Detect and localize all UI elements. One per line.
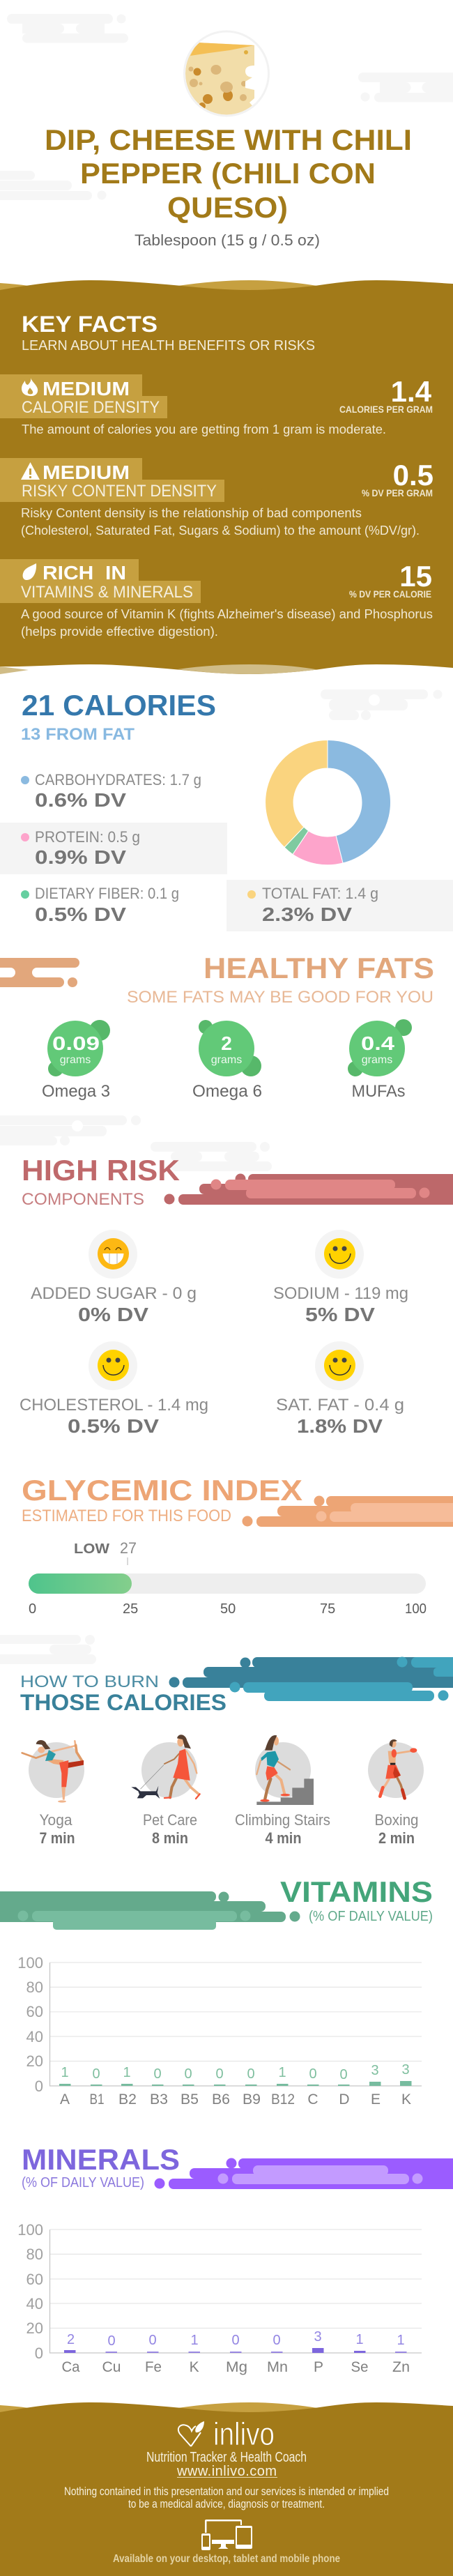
sodium item with smiley: SODIUM - 119 mg (273, 1284, 408, 1303)
omega 3 badge: 0.09 (52, 1032, 100, 1054)
sodium item with smiley (273, 1230, 408, 1325)
activity: pet care: Pet Care (143, 1811, 197, 1829)
panel: minerals (17, 2143, 453, 2375)
minerals bar chart: 0 (148, 2333, 157, 2348)
minerals bar chart (17, 2221, 422, 2375)
burn heading: THOSE CALORIES (20, 1690, 227, 1715)
panel: key facts (0, 280, 453, 674)
macro: total fat (247, 885, 378, 925)
saturated fat item with smiley: 1.8% DV (297, 1415, 383, 1437)
vitamins bar chart: 0 (153, 2066, 162, 2082)
fact: risky content density: MEDIUM (43, 462, 130, 483)
title: PEPPER (CHILI CON (80, 157, 376, 190)
vitamins bar chart: 0 (184, 2066, 192, 2082)
activity: pet care (131, 1735, 200, 1847)
activity: boxing: 2 min (378, 1829, 415, 1847)
fact: calorie density: CALORIE DENSITY (22, 398, 160, 417)
macro: dietary fiber (21, 885, 179, 925)
vitamins bar chart: 0 (309, 2066, 317, 2082)
decorative band (169, 1657, 453, 1688)
vitamins bar chart: E (371, 2091, 381, 2108)
cholesterol item with smiley: 0.5% DV (68, 1415, 159, 1437)
glycemic scale: 25 (123, 1601, 138, 1617)
vitamins bar chart: 80 (26, 1979, 43, 1996)
minerals bar chart: 100 (17, 2221, 43, 2239)
saturated fat item with smiley (276, 1341, 404, 1437)
vitamins bar chart: 0 (92, 2066, 100, 2082)
macro: total fat: 2.3% DV (262, 904, 352, 925)
glycemic heading: GLYCEMIC INDEX (22, 1474, 302, 1507)
MUFAs badge (348, 1019, 412, 1101)
donut chart (266, 740, 391, 865)
MUFAs badge: 0.4 (361, 1032, 395, 1054)
omega 6 badge (192, 1020, 262, 1101)
minerals bar chart: Mg (226, 2359, 247, 2375)
glycemic bar (29, 1573, 426, 1594)
activity: yoga (22, 1740, 84, 1847)
icon: devices (201, 2520, 252, 2550)
fact: rich in vitamins and minerals: % DV PER CALORIE (349, 588, 431, 600)
vitamins bar chart: C (307, 2091, 318, 2108)
minerals bar chart: 80 (26, 2246, 43, 2263)
vitamins bar chart: B6 (212, 2091, 230, 2108)
minerals bar chart: K (190, 2359, 199, 2375)
fact: risky content density: Risky Content density is the relationship of bad components (21, 506, 362, 520)
minerals bar chart: 20 (26, 2319, 43, 2337)
glycemic heading: ESTIMATED FOR THIS FOOD (22, 1507, 231, 1525)
vitamins bar chart: 0 (35, 2078, 43, 2095)
key facts heading (22, 312, 315, 353)
omega 3 badge: Omega 3 (42, 1082, 110, 1101)
fact: calorie density: 1.4 (391, 375, 432, 408)
high risk heading: HIGH RISK (22, 1154, 180, 1187)
title (45, 123, 412, 224)
healthy fats heading: HEALTHY FATS (204, 952, 434, 984)
website link: www.inlivo.com (176, 2464, 277, 2479)
sodium item with smiley: 5% DV (305, 1304, 375, 1325)
activity: pet care: 8 min (152, 1829, 188, 1847)
added sugar item with grinning face: ADDED SUGAR - 0 g (31, 1284, 197, 1303)
fact: risky content density: 0.5 (393, 459, 433, 491)
macro: carbohydrates (21, 771, 201, 811)
decorative band (0, 958, 79, 987)
burn heading (20, 1672, 227, 1715)
logo (178, 2416, 275, 2452)
omega 6 badge: grams (211, 1054, 242, 1066)
panel: healthy fats (0, 952, 434, 1101)
vitamins bar chart: 40 (26, 2028, 43, 2045)
serving size subtitle: Tablespoon (15 g / 0.5 oz) (135, 231, 320, 249)
minerals heading: MINERALS (22, 2143, 180, 2176)
decorative band (243, 1496, 453, 1527)
minerals bar chart: 60 (26, 2271, 43, 2288)
minerals bar chart: 2 (67, 2332, 75, 2347)
vitamins bar chart: 0 (339, 2067, 348, 2082)
minerals bar chart: Zn (392, 2359, 410, 2375)
key facts heading: KEY FACTS (22, 312, 158, 337)
glycemic scale: 75 (320, 1601, 335, 1617)
vitamins bar chart (17, 1954, 422, 2108)
vitamins bar chart: A (60, 2091, 70, 2108)
decorative band (155, 2158, 453, 2189)
minerals bar chart: 0 (231, 2333, 240, 2348)
MUFAs badge: MUFAs (351, 1082, 406, 1101)
vitamins bar chart: B3 (150, 2091, 168, 2108)
added sugar item with grinning face: 0% DV (78, 1304, 148, 1325)
macro: dietary fiber: DIETARY FIBER: 0.1 g (35, 885, 179, 902)
vitamins heading: VITAMINS (280, 1875, 433, 1908)
macro: protein: 0.9% DV (35, 846, 126, 868)
vitamins bar chart: 100 (17, 1954, 43, 1972)
fact: risky content density: RISKY CONTENT DENSITY (22, 482, 217, 501)
vitamins bar chart: 1 (278, 2065, 286, 2080)
glycemic value: 27 (120, 1539, 137, 1557)
calories heading: 21 CALORIES (22, 689, 216, 722)
activity: yoga: Yoga (39, 1811, 72, 1829)
MUFAs badge: grams (362, 1054, 392, 1066)
minerals bar chart: 1 (397, 2333, 405, 2348)
vitamins bar chart: 3 (371, 2063, 379, 2078)
fact: rich in vitamins and minerals: (helps provide effective digestion). (21, 625, 218, 639)
macro: protein (21, 828, 140, 868)
vitamins bar chart: B1 (89, 2091, 105, 2108)
tagline: Nutrition Tracker & Health Coach (146, 2450, 307, 2465)
minerals heading (22, 2143, 180, 2190)
minerals bar chart: 1 (190, 2333, 199, 2348)
vitamins bar chart: B2 (118, 2091, 137, 2108)
macro: carbohydrates: 0.6% DV (35, 789, 126, 811)
vitamins bar chart: B5 (181, 2091, 199, 2108)
icon: warning triangle (21, 462, 40, 480)
healthy fats heading (127, 952, 434, 1007)
added sugar item with grinning face (31, 1230, 197, 1325)
glycemic heading (22, 1474, 302, 1525)
macro: protein: PROTEIN: 0.5 g (35, 828, 140, 846)
fact: calorie density (0, 374, 433, 436)
high risk heading (22, 1154, 180, 1209)
cholesterol item with smiley: CHOLESTEROL - 1.4 mg (20, 1396, 208, 1415)
glycemic scale: 0 (29, 1601, 36, 1617)
saturated fat item with smiley: SAT. FAT - 0.4 g (276, 1396, 404, 1415)
activity: climbing stairs (235, 1735, 330, 1847)
calories heading (21, 689, 216, 744)
minerals bar chart: 1 (355, 2332, 364, 2347)
macro row boxes (0, 823, 453, 931)
activity: boxing (368, 1739, 424, 1847)
vitamins heading (280, 1875, 433, 1924)
fact: rich in vitamins and minerals: VITAMINS & MINERALS (21, 583, 193, 602)
minerals bar chart: 0 (272, 2333, 281, 2348)
vitamins bar chart: 60 (26, 2003, 43, 2020)
availability note: Available on your desktop, tablet and mobile phone (113, 2553, 340, 2565)
fact: calorie density: CALORIES PER GRAM (339, 404, 433, 415)
vitamins bar chart: D (339, 2091, 350, 2108)
panel: glycemic index (22, 1474, 453, 1617)
minerals bar chart: Fe (145, 2359, 162, 2375)
panel: high risk components (20, 1154, 453, 1437)
vitamins bar chart: K (401, 2091, 411, 2108)
minerals bar chart: 0 (107, 2333, 116, 2349)
omega 3 badge (42, 1020, 110, 1101)
icon: leaf (23, 563, 36, 580)
activity: climbing stairs: Climbing Stairs (235, 1811, 330, 1829)
macro: dietary fiber: 0.5% DV (35, 904, 126, 925)
panel: calories (0, 689, 453, 931)
glycemic scale (29, 1601, 427, 1617)
activity: yoga: 7 min (39, 1829, 75, 1847)
calories heading: 13 FROM FAT (21, 725, 135, 744)
minerals heading: (% OF DAILY VALUE) (22, 2175, 144, 2190)
fact: rich in vitamins and minerals (0, 559, 433, 639)
vitamins bar chart: 1 (123, 2065, 131, 2080)
logo: inlivo (213, 2416, 275, 2452)
fact: risky content density (0, 458, 433, 538)
minerals bar chart: 0 (35, 2345, 43, 2362)
glycemic value (74, 1539, 137, 1565)
title: QUESO) (167, 191, 288, 224)
minerals bar chart: Se (351, 2359, 368, 2375)
glycemic value: LOW (74, 1541, 109, 1557)
minerals bar chart: P (314, 2359, 323, 2375)
minerals bar chart: Cu (102, 2359, 121, 2375)
panel: vitamins (0, 1875, 433, 2108)
fact: rich in vitamins and minerals: 15 (399, 560, 432, 593)
icon: cheese photo in circle (183, 31, 270, 117)
fact: risky content density: (Cholesterol, Saturated Fat, Sugars & Sodium) to the amount (%DV/gr). (21, 524, 420, 538)
minerals bar chart: Mn (267, 2359, 288, 2375)
burn heading: HOW TO BURN (20, 1672, 159, 1691)
title: DIP, CHEESE WITH CHILI (45, 123, 412, 156)
fact: risky content density: % DV PER GRAM (362, 487, 433, 498)
vitamins bar chart: 0 (247, 2066, 255, 2082)
decorative band (164, 1174, 453, 1205)
minerals bar chart: Ca (61, 2359, 80, 2375)
macro: carbohydrates: CARBOHYDRATES: 1.7 g (35, 771, 201, 788)
high risk heading: COMPONENTS (22, 1190, 144, 1209)
disclaimer: to be a medical advice, diagnosis or treatment. (128, 2497, 325, 2510)
glycemic scale: 50 (220, 1601, 236, 1617)
fact: rich in vitamins and minerals: RICH IN (43, 562, 126, 584)
vitamins heading: (% OF DAILY VALUE) (309, 1909, 433, 1924)
vitamins bar chart: 20 (26, 2052, 43, 2070)
omega 3 badge: grams (60, 1054, 91, 1066)
fact: calorie density: The amount of calories you are getting from 1 gram is moderate. (22, 422, 386, 436)
disclaimer (64, 2485, 389, 2510)
icon: flame (22, 378, 38, 396)
key facts heading: LEARN ABOUT HEALTH BENEFITS OR RISKS (22, 338, 315, 353)
activity: climbing stairs: 4 min (265, 1829, 301, 1847)
omega 6 badge: Omega 6 (192, 1082, 262, 1101)
macro: total fat: TOTAL FAT: 1.4 g (262, 885, 378, 902)
panel: how to burn those calories (20, 1656, 453, 1847)
decorative band (0, 1891, 300, 1922)
vitamins bar chart: 0 (215, 2066, 224, 2082)
vitamins bar chart: B9 (243, 2091, 261, 2108)
minerals bar chart: 3 (314, 2329, 322, 2345)
cholesterol item with smiley (20, 1341, 208, 1437)
glycemic scale: 100 (405, 1601, 427, 1617)
fact: calorie density: MEDIUM (43, 378, 130, 399)
minerals bar chart: 40 (26, 2295, 43, 2312)
activity: boxing: Boxing (375, 1811, 418, 1829)
vitamins bar chart: 3 (401, 2062, 410, 2078)
vitamins bar chart: 1 (61, 2065, 69, 2080)
healthy fats heading: SOME FATS MAY BE GOOD FOR YOU (127, 988, 433, 1007)
fact: rich in vitamins and minerals: A good source of Vitamin K (fights Alzheimer's disease) and Phosphorus (21, 607, 433, 621)
panel: footer (0, 2402, 453, 2576)
omega 6 badge: 2 (221, 1032, 232, 1054)
vitamins bar chart: B12 (271, 2091, 295, 2108)
